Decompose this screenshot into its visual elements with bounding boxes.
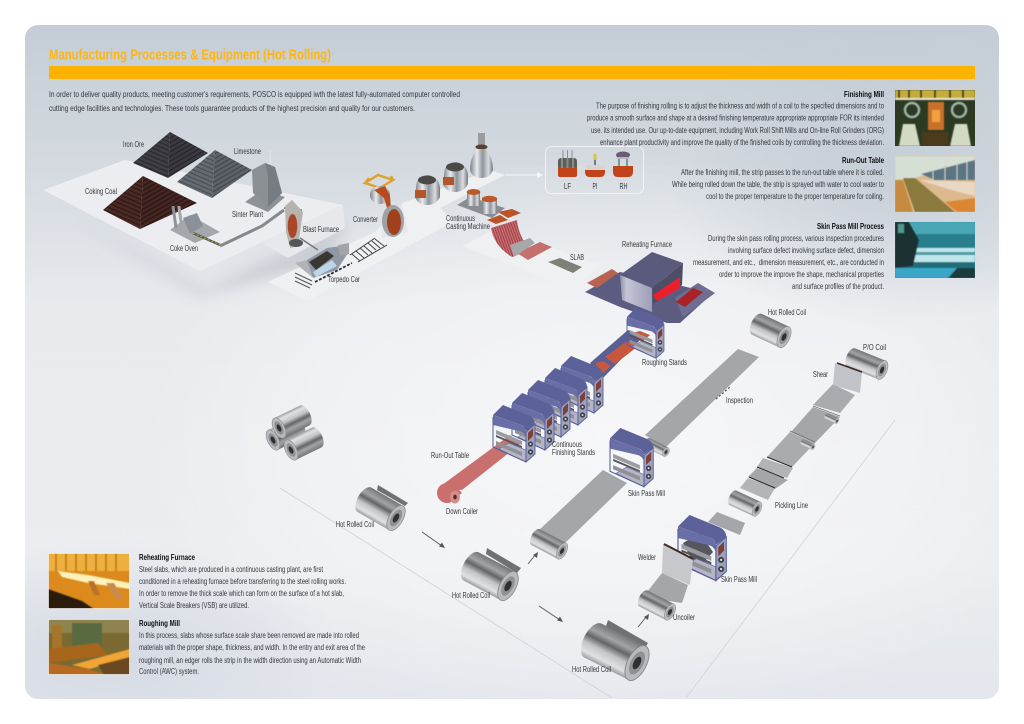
RH label: RH (620, 182, 628, 191)
process labels: Pickling Line (775, 501, 808, 510)
icon: hot rolled coil 3 (576, 619, 654, 684)
text block: reheating furnace: In order to remove the thick scale which can form on the surface of a hot slab, (139, 589, 344, 598)
icon: roughing stand (627, 308, 664, 358)
text block: reheating furnace: Steel slabs, which are produced in a continuous casting plant, are first (139, 565, 324, 574)
icon: PI vessel (585, 154, 605, 177)
icon: hot rolled coil 2 (457, 548, 523, 604)
text block: skin pass mill process: Skin Pass Mill Process (817, 222, 884, 231)
intro text block (49, 90, 460, 113)
process labels: P/O Coil (863, 343, 886, 352)
text block: run-out table: cool to the proper temperature to the proper temperature for coiling. (706, 192, 884, 201)
text block: roughing mill: Roughing Mill (139, 619, 180, 628)
text block: skin pass mill process (693, 222, 884, 291)
text block: run-out table: After the finishing mill, the strip passes to the run-out table where it is coiled. (681, 168, 884, 177)
text block: finishing mill: enhance plant productivity and improve the quality of the finished coils by controlling the thickness deviation. (600, 138, 884, 147)
text block: reheating furnace: Reheating Furnace (139, 553, 195, 562)
panel: slab platform (462, 228, 602, 288)
photo: run-out table (895, 156, 975, 212)
process labels: Hot Rolled Coil (336, 520, 374, 529)
text block: run-out table: Run-Out Table (842, 156, 884, 165)
process labels: Hot Rolled Coil (768, 308, 806, 317)
icon: welder (643, 544, 693, 603)
process labels: Coke Oven (170, 244, 198, 253)
icon: hot rolled coil top (747, 312, 794, 350)
text block: reheating furnace: Vertical Scale Breakers (VSB) are utilized. (139, 601, 249, 610)
icon: coke oven (170, 206, 220, 245)
process labels: Blast Furnace (303, 225, 339, 234)
photo: skin pass mill (895, 222, 975, 278)
process labels: Continuous (552, 440, 582, 449)
text block: roughing mill: In this process, slabs whose surface scale share been removed are made into rolled (139, 631, 359, 640)
process labels: Converter (353, 215, 378, 224)
arrow: coil 1 to coil 2 (422, 532, 445, 548)
icon: LF vessel (558, 150, 577, 177)
icon: pickling line (726, 384, 855, 518)
icon: down coiler (437, 482, 462, 504)
icon: strip end coil (528, 527, 570, 561)
text block: run-out table (672, 156, 885, 201)
text block: run-out table: While being rolled down the table, the strip is sprayed with water to cool water to (672, 180, 885, 189)
process labels: Hot Rolled Coil (572, 665, 611, 674)
process labels: SLAB (570, 253, 584, 262)
text block: finishing mill: Finishing Mill (844, 90, 884, 99)
text block: reheating furnace: conditioned in a reheating furnace before transferring to the steel rolling works. (139, 577, 346, 586)
panel: raw materials platform (43, 160, 350, 296)
icon: sinter plant (245, 150, 285, 212)
icon: skin pass mill 2 (678, 512, 745, 581)
icon: skin pass mill 1 (610, 428, 653, 487)
arrow: coil 3 to uncoiler (638, 614, 649, 627)
text block: skin pass mill process: involving surface defect involving surface defect, dimension (728, 246, 884, 255)
text block: finishing mill (587, 90, 885, 147)
process labels: Welder (638, 553, 656, 562)
intro text block: cutting edge facilities and technologies. These tools guarantee products of the highest precision and quality for our customers. (49, 104, 415, 113)
icon: continuous casting machine (457, 189, 552, 260)
icon: conveyor belt (220, 210, 284, 246)
title: Manufacturing Processes & Equipment (Hot Rolling) (49, 46, 331, 64)
icon: rail track (350, 238, 387, 262)
text block: roughing mill: roughing mill, an edger rolls the strip in the width direction using an Automatic Width (139, 656, 361, 665)
icon: blast furnace (284, 200, 318, 250)
icon: RH vessel (613, 152, 633, 177)
process labels: Iron Ore (123, 140, 144, 149)
text block: roughing mill: Control (AWC) system. (139, 667, 199, 676)
process labels: Sinter Plant (232, 210, 264, 219)
process labels: Skin Pass Mill (721, 575, 757, 584)
photo: reheating furnace (48, 553, 130, 609)
text block: skin pass mill process: measurement, and etc., dimension measurement, etc., are conducted in (693, 258, 884, 267)
text block: skin pass mill process: During the skin pass rolling process, various inspection procedures (708, 234, 884, 243)
arrow: coil 2 to skin pass line (528, 552, 538, 564)
icon: limestone pile (177, 150, 252, 198)
icon: P/O coil (843, 346, 890, 381)
process labels: Casting Machine (446, 222, 490, 231)
text block: roughing mill: materials with the proper shape, thickness, and width. In the entry and exit area of the (139, 643, 365, 652)
process labels: Limestone (234, 147, 261, 156)
text block: roughing mill (139, 619, 365, 676)
icon: coking coal pile (103, 176, 197, 229)
icon: uncoiler coil (635, 588, 678, 622)
process labels: Down Coiler (446, 507, 478, 516)
process labels: Uncoiler (673, 613, 695, 622)
process labels: Skin Pass Mill (628, 489, 665, 498)
LF label: LF (564, 182, 571, 191)
panel: secondary refining box (546, 146, 644, 194)
title bar (49, 66, 975, 79)
process labels: Run-Out Table (431, 451, 469, 460)
text block: finishing mill: produce a smooth surface and shape at a desired finishing temperature appropriate appropriate FOR its intended (587, 114, 884, 123)
icon: slab (548, 258, 582, 273)
process labels: Reheating Furnace (622, 240, 672, 249)
icon: ladle (443, 162, 468, 192)
text block: finishing mill: The purpose of finishing rolling is to adjust the thickness and width of a coil to the specified dimensions and to (596, 102, 885, 111)
process labels: Coking Coal (85, 187, 117, 196)
icon: hot rolled coil 1 (351, 484, 409, 534)
arrow: coil 2 to coil 3 (539, 606, 563, 622)
process labels: Shear (813, 370, 828, 379)
process labels: Roughing Stands (642, 358, 687, 367)
icon: inspection strip (537, 349, 759, 543)
text block: finishing mill: use. its intended use. Our up-to-date equipment, including Work Roll Shift Mills and On-line Roll Grinders (ORG) (591, 126, 884, 135)
process labels: Inspection (726, 396, 753, 405)
process labels: Hot Rolled Coil (452, 591, 490, 600)
icon: shear (833, 363, 862, 393)
text block: skin pass mill process: order to improve the improve the shape, mechanical properties (719, 270, 884, 279)
panel: steelmaking platform (268, 170, 505, 301)
icon: ladle (415, 175, 440, 205)
icon: coil stack (263, 403, 326, 462)
process labels: Finishing Stands (552, 448, 595, 457)
process labels (85, 140, 886, 674)
icon: continuous finishing stands (438, 356, 603, 490)
icon: tall ladle (470, 133, 493, 178)
icon: roller table (590, 330, 650, 378)
icon: torpedo car (295, 243, 352, 288)
PI label: PI (592, 182, 598, 191)
text block: reheating furnace (139, 553, 346, 610)
process labels: Torpedo Car (328, 275, 360, 284)
process labels: Continuous (446, 214, 475, 223)
text block: skin pass mill process: and surface profiles of the product. (792, 282, 884, 291)
photo: roughing mill (48, 619, 130, 675)
intro text block: In order to deliver quality products, meeting customer's requirements, POSCO is equipped iwth the latest fully-automated computer controlled (49, 90, 460, 99)
arrow: ladle to refining box (505, 172, 543, 178)
icon: iron ore pile (133, 132, 208, 178)
icon: reheating furnace (585, 252, 715, 323)
icon: converter (365, 175, 408, 238)
photo: finishing mill (895, 90, 975, 146)
